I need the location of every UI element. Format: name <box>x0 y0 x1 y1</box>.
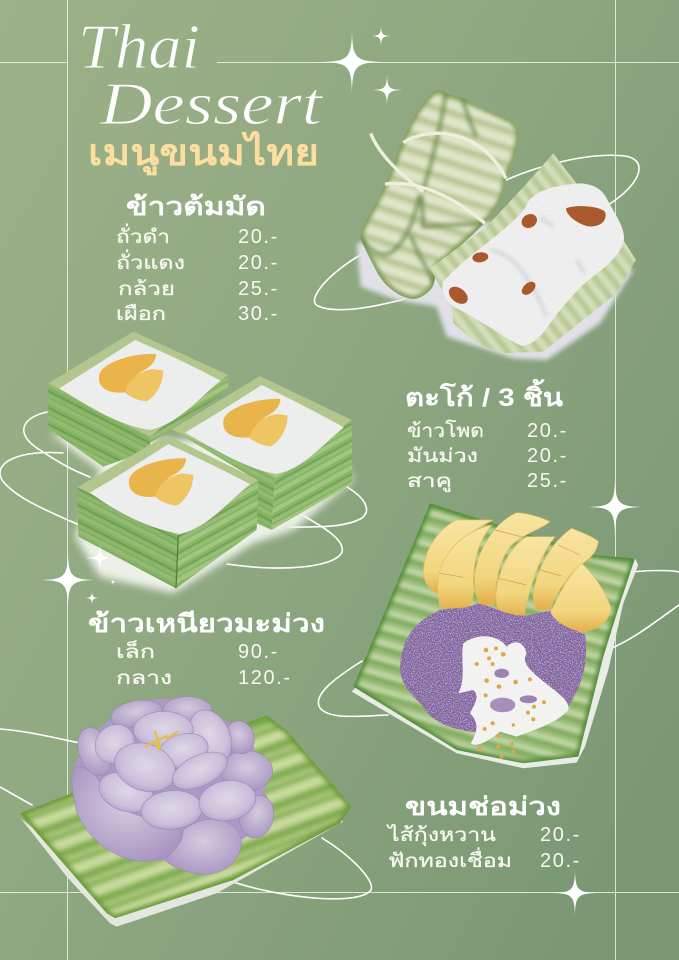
menu: khao tom mat: 20.- <box>238 226 279 248</box>
menu: ta ko <box>405 378 568 492</box>
menu: khao tom mat <box>116 193 279 325</box>
menu: khanom cho muang: ไส้กุ้งหวาน <box>386 824 496 847</box>
back left box <box>48 332 228 467</box>
menu: khao tom mat: 30.- <box>238 303 279 325</box>
menu: khanom cho muang: ฟักทองเชื่อม <box>388 847 512 872</box>
illustration: khanom cho muang <box>20 696 352 927</box>
sticky rice <box>442 183 624 346</box>
menu: mango sticky rice: 90.- <box>238 641 279 663</box>
soft shadow <box>357 220 633 360</box>
menu: khanom cho muang <box>386 793 581 872</box>
menu: mango sticky rice: ข้าวเหนียวมะม่วง <box>88 610 325 638</box>
menu: ta ko: 25.- <box>527 470 568 492</box>
title: Thai Dessert <box>78 11 324 137</box>
subtitle: เมนูขนมไทย <box>88 130 319 176</box>
menu: ta ko: มันม่วง <box>407 446 478 467</box>
right leaf <box>430 154 636 354</box>
purple sticky rice <box>400 603 586 733</box>
menu: khao tom mat: ถั่วแดง <box>116 249 185 274</box>
illustration: ta ko <box>48 332 353 593</box>
menu: khao tom mat: กล้วย <box>118 279 175 300</box>
stamens <box>146 732 178 750</box>
mung beans <box>475 646 546 759</box>
menu: mango sticky rice: กลาง <box>116 668 172 689</box>
menu: ta ko: 20.- <box>527 445 568 467</box>
illustration: mango sticky rice <box>352 504 638 768</box>
back right box <box>172 376 353 530</box>
tie strings <box>371 133 506 223</box>
menu: mango sticky rice: 120.- <box>238 667 292 689</box>
menu: khao tom mat: 25.- <box>238 278 279 300</box>
menu: khao tom mat: เผือก <box>116 304 166 325</box>
front box <box>77 435 258 588</box>
menu: khanom cho muang: ขนมช่อม่วง <box>405 793 561 821</box>
banana leaf <box>354 504 635 764</box>
orbit lines <box>0 155 679 899</box>
title: Thai Dessert: Dessert <box>99 71 324 137</box>
torn paper edge <box>352 558 638 768</box>
menu: mango sticky rice: เล็ก <box>116 639 155 663</box>
back petals <box>72 696 278 875</box>
menu: ta ko: 20.- <box>527 420 568 442</box>
menu: khao tom mat: 20.- <box>238 252 279 274</box>
title: Thai Dessert: Thai <box>78 11 200 82</box>
menu: khao tom mat: ถั่วดำ <box>116 223 170 248</box>
mango slices <box>423 513 611 632</box>
left wrapped packet <box>360 90 519 299</box>
leaf <box>20 715 352 918</box>
menu: khanom cho muang: 20.- <box>540 850 581 872</box>
menu: ta ko: ข้าวโพด <box>407 419 484 442</box>
beans <box>446 206 606 307</box>
menu: mango sticky rice <box>88 610 325 689</box>
menu: ta ko: สาคู <box>407 471 452 492</box>
glow <box>50 433 353 593</box>
menu: ta ko: ตะโก้ / 3 ชิ้น <box>405 378 563 412</box>
flower body <box>71 699 269 875</box>
front petals <box>87 703 259 832</box>
menu: khanom cho muang: 20.- <box>540 824 581 846</box>
illustration: khao tom mat <box>354 90 636 363</box>
paper edge <box>21 813 343 927</box>
coconut cream <box>458 636 569 745</box>
menu: khao tom mat: ข้าวต้มมัด <box>126 193 266 221</box>
